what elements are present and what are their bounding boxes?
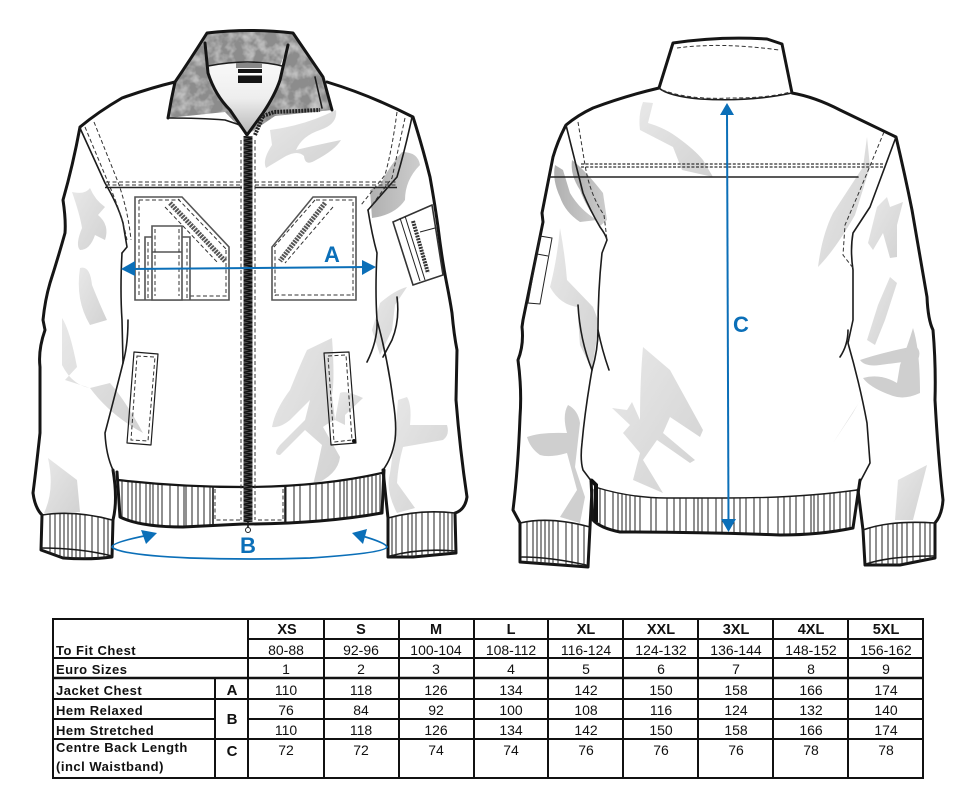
- size table: [53, 619, 923, 778]
- back sleeve tab: [528, 236, 552, 304]
- row: hem relaxed: 116: [650, 702, 672, 718]
- row: hem relaxed: 84: [353, 702, 369, 718]
- row: centre back length: 76: [728, 742, 744, 758]
- row: euro sizes: Euro Sizes: [56, 662, 127, 677]
- row: hem stretched: Hem Stretched: [56, 723, 154, 738]
- front cuffs: [41, 510, 456, 560]
- row: centre back length: 72: [278, 742, 294, 758]
- back camouflage pattern: [527, 102, 927, 523]
- front body outline: [33, 82, 467, 559]
- header row: 4XL: [798, 622, 824, 638]
- row label B: B: [227, 711, 238, 728]
- row: hem stretched: 110: [275, 722, 297, 738]
- row: to fit chest: 116-124: [561, 642, 611, 658]
- sleeve pocket: [393, 205, 443, 285]
- row: to fit chest: 124-132: [635, 642, 687, 658]
- front camouflage pattern: [44, 110, 448, 513]
- row: hem stretched: 158: [724, 722, 748, 738]
- header row: 5XL: [873, 622, 899, 638]
- row: jacket chest: 150: [649, 682, 673, 698]
- row: jacket chest: 110: [275, 682, 297, 698]
- label C: C: [733, 312, 749, 337]
- table grid: [53, 619, 923, 778]
- row: euro sizes: 8: [807, 661, 815, 677]
- row: centre back length: 78: [803, 742, 819, 758]
- row: centre back length: 74: [428, 742, 444, 758]
- row: centre back length: 78: [878, 742, 894, 758]
- row: euro sizes: [56, 661, 890, 677]
- yoke seam: [105, 182, 397, 188]
- slash pockets: [127, 352, 356, 445]
- row: euro sizes: 1: [282, 661, 290, 677]
- row: to fit chest: 108-112: [486, 642, 536, 658]
- back outline: [513, 38, 943, 567]
- row: to fit chest: 136-144: [710, 642, 762, 658]
- row: centre back length: [56, 740, 894, 774]
- row: centre back length: 72: [353, 742, 369, 758]
- back hem rib: [591, 480, 860, 540]
- arrow B: hem: [112, 529, 387, 559]
- row: to fit chest: To Fit Chest: [56, 643, 136, 658]
- row: hem relaxed: 124: [724, 702, 748, 718]
- back cuffs: [521, 520, 934, 566]
- row: hem relaxed: [56, 702, 898, 718]
- row: hem stretched: 118: [350, 722, 372, 738]
- row: jacket chest: Jacket Chest: [56, 683, 142, 698]
- row: hem stretched: 174: [874, 722, 898, 738]
- row: jacket chest: 134: [499, 682, 523, 698]
- row: jacket chest: 174: [874, 682, 898, 698]
- row: jacket chest: [56, 682, 898, 699]
- header row: M: [430, 622, 442, 638]
- header row: S: [356, 622, 366, 638]
- right chest pocket: [272, 197, 356, 300]
- row: to fit chest: [56, 642, 912, 658]
- row: to fit chest: 148-152: [785, 642, 837, 658]
- row: hem relaxed: 132: [799, 702, 823, 718]
- header row: 3XL: [723, 622, 749, 638]
- row: euro sizes: 9: [882, 661, 890, 677]
- row: jacket chest: 166: [799, 682, 823, 698]
- row: to fit chest: 80-88: [268, 642, 304, 658]
- row: euro sizes: 2: [357, 661, 365, 677]
- row: centre back length: 74: [503, 742, 519, 758]
- row: jacket chest: 126: [424, 682, 448, 698]
- centre zip: [241, 136, 255, 532]
- header row: XS: [277, 622, 297, 638]
- row: euro sizes: 3: [432, 661, 440, 677]
- row: jacket chest: 142: [574, 682, 598, 698]
- row: euro sizes: 5: [582, 661, 590, 677]
- row: hem stretched: 134: [499, 722, 523, 738]
- row: hem stretched: 126: [424, 722, 448, 738]
- neck label: [236, 63, 262, 83]
- row: hem stretched: 150: [649, 722, 673, 738]
- label B: B: [240, 533, 256, 558]
- arrow C: centre back length: [720, 103, 749, 532]
- row: hem relaxed: 140: [874, 702, 898, 718]
- row: hem relaxed: 100: [499, 702, 523, 718]
- row: hem stretched: 142: [574, 722, 598, 738]
- row: centre back length: C: [227, 743, 238, 760]
- row: to fit chest: 100-104: [410, 642, 462, 658]
- header row: L: [507, 622, 516, 638]
- back jacket illustration: [513, 38, 943, 570]
- row: hem relaxed: 76: [278, 702, 294, 718]
- row: jacket chest: 158: [724, 682, 748, 698]
- row: hem stretched: [56, 722, 898, 738]
- row: to fit chest: 92-96: [343, 642, 379, 658]
- row: centre back length: 76: [578, 742, 594, 758]
- front hem rib: [117, 470, 384, 530]
- row: euro sizes: 7: [732, 661, 740, 677]
- row: euro sizes: 4: [507, 661, 515, 677]
- row: hem relaxed: 92: [428, 702, 444, 718]
- row: centre back length: 76: [653, 742, 669, 758]
- row: jacket chest: A: [227, 682, 238, 699]
- label A: A: [324, 242, 340, 267]
- row: jacket chest: 118: [350, 682, 372, 698]
- row: hem relaxed: 108: [574, 702, 598, 718]
- row: hem relaxed: Hem Relaxed: [56, 703, 143, 718]
- header row: XL: [577, 622, 595, 638]
- row: hem stretched: 166: [799, 722, 823, 738]
- arrow A: jacket chest: [121, 242, 376, 276]
- row: euro sizes: 6: [657, 661, 665, 677]
- header row: [277, 622, 899, 638]
- row: to fit chest: 156-162: [860, 642, 912, 658]
- left chest pocket: [135, 197, 229, 300]
- header row: XXL: [647, 622, 675, 638]
- front jacket illustration: [33, 30, 467, 560]
- row: centre back length: (incl Waistband): [56, 759, 164, 774]
- collar: [168, 30, 332, 135]
- row: centre back length: Centre Back Length: [56, 740, 188, 755]
